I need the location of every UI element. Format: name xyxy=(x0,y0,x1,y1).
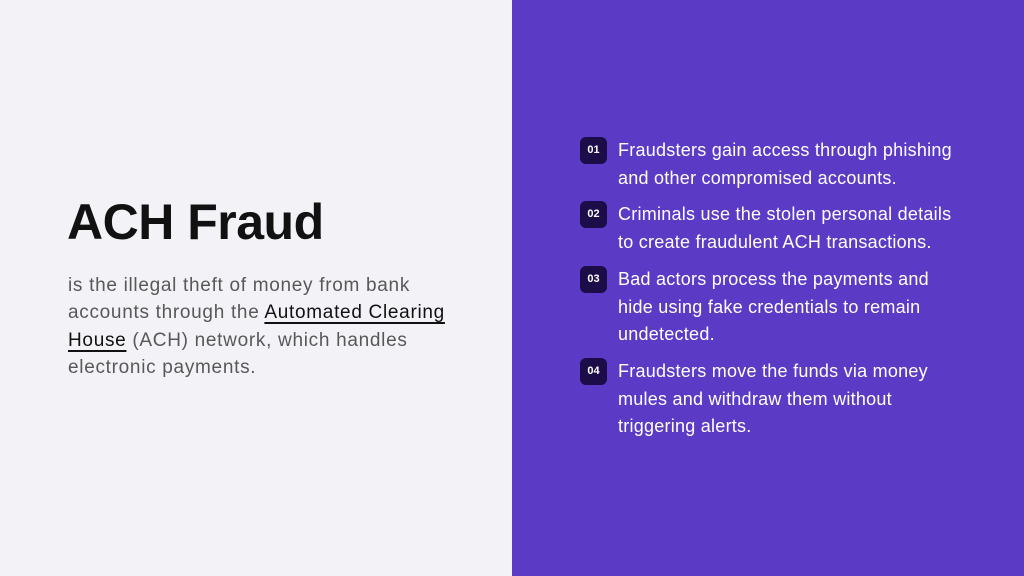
step 03 text: hide using fake credentials to remain xyxy=(618,296,920,316)
text block: definition: accounts through the Automated Clearing xyxy=(68,302,445,323)
step 02 text xyxy=(618,204,951,252)
badge 03: 03 xyxy=(587,273,600,285)
step 04 text: triggering alerts. xyxy=(618,416,752,436)
step 02 text: Criminals use the stolen personal details xyxy=(618,204,951,224)
step 03 text: undetected. xyxy=(618,324,715,344)
step 03 text xyxy=(618,269,929,344)
step 04 xyxy=(580,358,928,436)
badge 01 xyxy=(580,137,607,164)
step 04 text: Fraudsters move the funds via money xyxy=(618,361,928,381)
text block: definition xyxy=(68,275,445,378)
badge 04: 04 xyxy=(587,365,600,377)
step 03 text: Bad actors process the payments and xyxy=(618,269,929,289)
step 02 xyxy=(580,201,951,252)
badge 02: 02 xyxy=(587,208,600,220)
panel: left definition xyxy=(0,0,512,576)
step 04 text xyxy=(618,361,928,436)
panel: right steps xyxy=(512,0,1024,576)
badge 01: 01 xyxy=(587,144,600,156)
step 02 text: to create fraudulent ACH transactions. xyxy=(618,232,932,252)
title: ACH Fraud xyxy=(67,194,324,250)
text block: definition: House (ACH) network, which handles xyxy=(68,330,408,351)
step 03 xyxy=(580,266,929,344)
step 01 text: Fraudsters gain access through phishing xyxy=(618,140,952,160)
step 01 text xyxy=(618,140,952,188)
step 04 text: mules and withdraw them without xyxy=(618,388,892,408)
badge 04 xyxy=(580,358,607,385)
badge 02 xyxy=(580,201,607,228)
text block: definition: is the illegal theft of money from bank xyxy=(68,275,410,296)
badge 03 xyxy=(580,266,607,293)
step 01 xyxy=(580,137,952,188)
step 01 text: and other compromised accounts. xyxy=(618,168,897,188)
text block: definition: electronic payments. xyxy=(68,357,256,378)
